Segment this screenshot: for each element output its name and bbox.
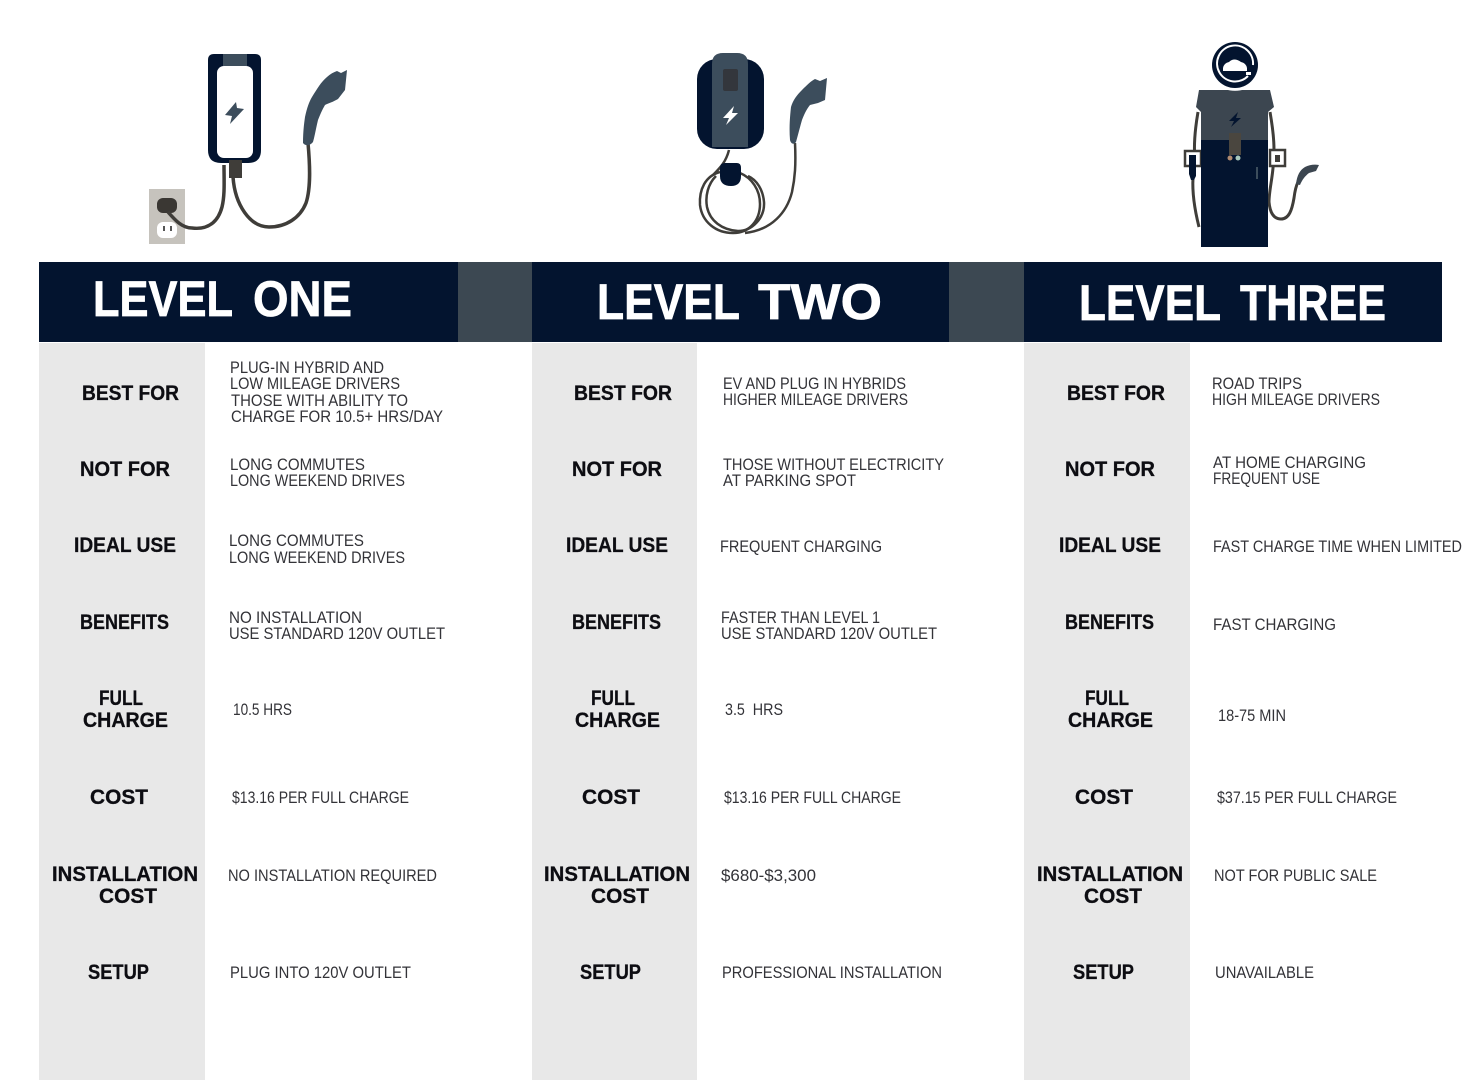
panel: level two labels column: IDEAL USE [566,534,668,557]
panel: level two labels column: BENEFITS [572,611,661,634]
panel: level two values [720,375,944,982]
right connector [1296,165,1319,185]
heading: level two: LEVEL [597,274,740,330]
panel: level one labels column: FULL [99,687,143,710]
cable coil [700,143,795,233]
bolt [225,102,244,124]
panel: level two values: $680-$3,300 [721,867,816,885]
panel: level three values: HIGH MILEAGE DRIVERS [1212,391,1380,409]
panel: level two values: USE STANDARD 120V OUTLET [721,625,937,643]
panel: level three values: FREQUENT USE [1213,470,1320,488]
panel: level two values: $13.16 PER FULL CHARGE [724,789,901,807]
panel: level three labels column: FULL [1085,687,1129,710]
header gap left [458,262,532,342]
heading: level one: ONE [253,271,352,327]
panel: level one values: NO INSTALLATION REQUIRED [228,867,437,885]
panel: level three labels column: SETUP [1073,961,1134,984]
panel: level one labels column: NOT FOR [80,458,170,481]
panel: level one labels column: SETUP [88,961,149,984]
panel: level three labels column: COST [1075,786,1133,809]
panel: level three values: ROAD TRIPS [1212,375,1302,393]
panel: level two labels column: NOT FOR [572,458,662,481]
panel: level two values: EV AND PLUG IN HYBRIDS [723,375,906,393]
badge [1209,39,1261,91]
cables [1193,112,1298,227]
heading: level three [1079,275,1386,331]
body [1201,140,1268,247]
panel: level three values: 18-75 MIN [1218,707,1286,725]
charger body [697,59,764,149]
heading: level one: LEVEL [93,271,233,327]
level one header band [39,262,1442,342]
panel: level three values [1212,375,1462,982]
holsters [1185,151,1201,166]
heading: level three: LEVEL [1079,275,1221,331]
panel: level one values: LONG WEEKEND DRIVES [230,472,405,490]
heading: level three: THREE [1240,275,1386,331]
panel: level two values: 3.5 HRS [725,701,783,719]
heading: level two: TWO [758,274,882,330]
panel: level two labels column: COST [591,885,649,908]
holster [720,163,741,186]
heading: level two [597,274,882,330]
panel: level one values [228,359,445,982]
panel: level two values: HIGHER MILEAGE DRIVERS [723,391,908,409]
bolt [723,106,738,125]
panel: level two labels column: BEST FOR [574,382,672,405]
panel: level two values: FREQUENT CHARGING [720,538,882,556]
panel: level two values: FASTER THAN LEVEL 1 [721,609,880,627]
icon: level two wall charger [697,53,827,233]
panel: level one values: LOW MILEAGE DRIVERS [230,375,400,393]
panel: level one values: THOSE WITH ABILITY TO [231,392,408,410]
panel: level three values: $37.15 PER FULL CHARGE [1217,789,1397,807]
panel: level one values: PLUG INTO 120V OUTLET [230,964,411,982]
panel: level one labels column: COST [90,786,148,809]
panel: level two labels column [532,343,697,1080]
panel: level one values: USE STANDARD 120V OUTLET [229,625,445,643]
panel: level three labels column: BENEFITS [1065,611,1154,634]
panel: level one values: CHARGE FOR 10.5+ HRS/DAY [231,408,443,426]
panel: level two labels column: INSTALLATION [544,863,690,886]
panel: level three values: FAST CHARGING [1213,616,1336,634]
panel: level two labels column: CHARGE [575,709,660,732]
panel: level one values: LONG WEEKEND DRIVES [229,549,405,567]
panel: level one labels column [39,343,205,1080]
panel: level three labels column: BEST FOR [1067,382,1165,405]
panel: level three labels column: NOT FOR [1065,458,1155,481]
left connector [1189,155,1196,180]
header gap right [949,262,1024,342]
panel: level three values: NOT FOR PUBLIC SALE [1214,867,1377,885]
panel: level three labels column [1024,343,1190,1080]
panel: level three labels column: IDEAL USE [1059,534,1161,557]
panel: level one labels column: COST [99,885,157,908]
connector handle [790,78,827,144]
panel: level one labels column: IDEAL USE [74,534,176,557]
panel: level three labels column: COST [1084,885,1142,908]
panel: level one labels column: CHARGE [83,709,168,732]
panel: level two labels column: SETUP [580,961,641,984]
connector handle [303,70,347,145]
panel: level three labels column: INSTALLATION [1037,863,1183,886]
charger body [208,54,261,163]
bolt [1229,112,1241,127]
panel: level two values: PROFESSIONAL INSTALLATION [722,964,942,982]
panel: level two values: THOSE WITHOUT ELECTRICITY [723,456,944,474]
panel: level one values: $13.16 PER FULL CHARGE [232,789,409,807]
panel: level one values: 10.5 HRS [233,701,292,719]
charger cables [168,165,224,228]
panel: level one labels column: INSTALLATION [52,863,198,886]
panel: level one labels column: BENEFITS [80,611,169,634]
panel: level two labels column: FULL [591,687,635,710]
outlet [149,189,185,244]
panel: level one values: NO INSTALLATION [229,609,362,627]
panel: level three values: AT HOME CHARGING [1213,454,1366,472]
panel: level two labels column: COST [582,786,640,809]
icon: level three DC fast charger [1185,39,1319,247]
panel: level one labels column: BEST FOR [82,382,179,405]
panel: level three labels column: CHARGE [1068,709,1153,732]
panel: level one values: LONG COMMUTES [230,456,365,474]
panel: level one values: LONG COMMUTES [229,532,364,550]
panel: level three values: UNAVAILABLE [1215,964,1314,982]
icon: level one portable charger [149,54,347,244]
heading: level one [93,271,352,327]
panel: level one values: PLUG-IN HYBRID AND [230,359,384,377]
panel: level two values: AT PARKING SPOT [723,472,856,490]
